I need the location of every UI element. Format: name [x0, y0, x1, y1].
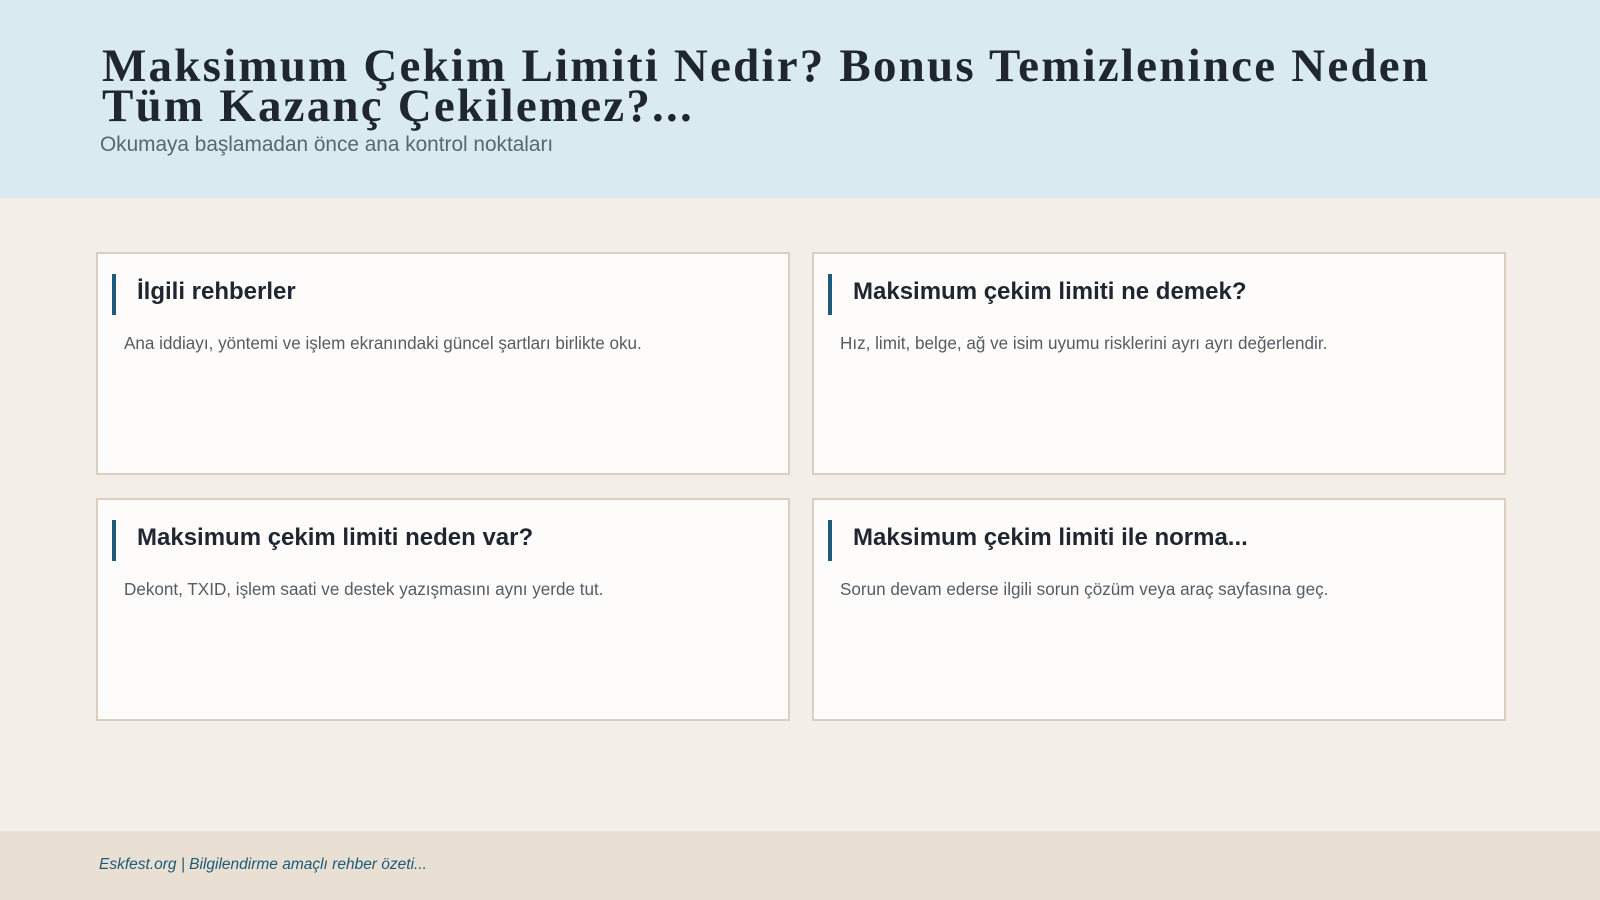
- panel: neden var: [96, 498, 790, 721]
- footer text: Eskfest.org | Bilgilendirme amaçlı rehber özeti...: [99, 856, 427, 873]
- panel: ilgili rehberler: [96, 252, 790, 475]
- panel: ne demek: [812, 252, 1506, 475]
- accent bar: [828, 274, 832, 315]
- title: [102, 40, 1430, 132]
- panel text: Hız, limit, belge, ağ ve isim uyumu risklerini ayrı ayrı değerlendir.: [840, 334, 1327, 353]
- panel text: Dekont, TXID, işlem saati ve destek yazışmasını aynı yerde tut.: [124, 580, 603, 599]
- panel text: Ana iddiayı, yöntemi ve işlem ekranındaki güncel şartları birlikte oku.: [124, 334, 642, 353]
- panel: ile norma: [812, 498, 1506, 721]
- footer band: [0, 831, 1600, 900]
- panel text: Sorun devam ederse ilgili sorun çözüm veya araç sayfasına geç.: [840, 580, 1328, 599]
- title: Maksimum Çekim Limiti Nedir? Bonus Temizlenince Neden: [102, 40, 1430, 92]
- panel heading: Maksimum çekim limiti ne demek?: [853, 278, 1246, 305]
- panel heading: Maksimum çekim limiti neden var?: [137, 524, 533, 551]
- accent bar: [112, 520, 116, 561]
- header band: [0, 0, 1600, 198]
- accent bar: [828, 520, 832, 561]
- panel heading: İlgili rehberler: [137, 278, 296, 305]
- panel heading: Maksimum çekim limiti ile norma...: [853, 524, 1248, 551]
- accent bar: [112, 274, 116, 315]
- subtitle: Okumaya başlamadan önce ana kontrol noktaları: [100, 133, 553, 156]
- title: Tüm Kazanç Çekilemez?...: [102, 80, 694, 132]
